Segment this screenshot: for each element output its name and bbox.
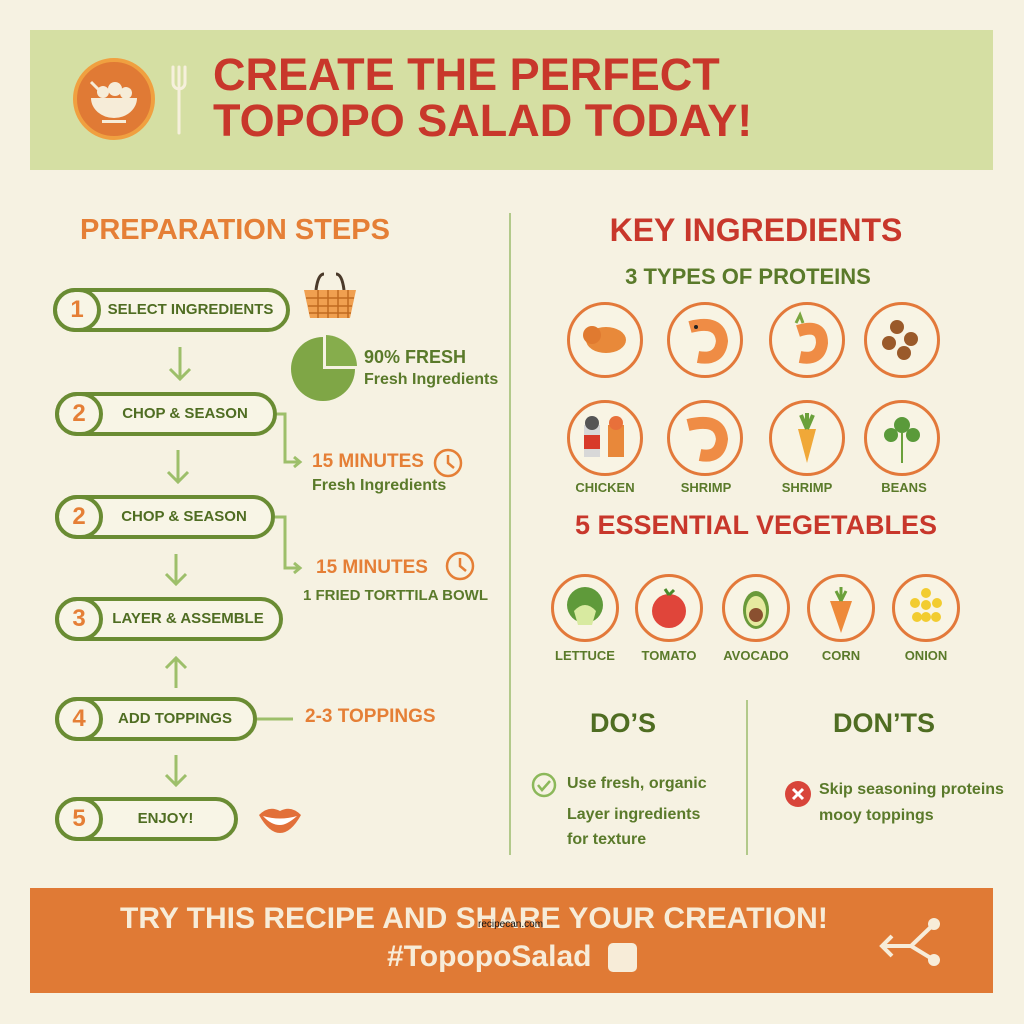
step 1: SELECT INGREDIENTS xyxy=(108,301,273,318)
divider xyxy=(509,213,511,855)
icon: share xyxy=(879,918,940,966)
label: avocado: AVOCADO xyxy=(723,648,789,663)
heading: do's: DO’S xyxy=(590,708,656,738)
icon: lettuce xyxy=(551,574,619,642)
title xyxy=(213,49,752,146)
stat: 15 minutes xyxy=(312,451,446,494)
icon: chicken xyxy=(567,302,643,378)
step 2b: CHOP & SEASON xyxy=(121,508,247,525)
icon: carrot xyxy=(769,400,845,476)
step 2: 2 xyxy=(72,400,86,427)
label: tomato: TOMATO xyxy=(642,648,696,663)
icon: clock xyxy=(434,448,462,478)
stat: 15 minutes tortilla xyxy=(303,557,488,604)
don'ts list xyxy=(785,781,1004,824)
stat: 90% fresh: Fresh Ingredients xyxy=(364,371,498,388)
stat: 15 minutes tortilla: 15 MINUTES xyxy=(316,557,428,578)
icon: check xyxy=(532,772,556,798)
do's list: Use fresh, organic xyxy=(567,775,707,792)
heading: key ingredients: KEY INGREDIENTS xyxy=(610,212,902,248)
icon: shrimp xyxy=(769,302,845,378)
do's list: Layer ingredients xyxy=(567,806,700,823)
step 1 xyxy=(53,288,290,332)
icon: tomato xyxy=(635,574,703,642)
arrows and connectors xyxy=(165,347,302,787)
title: TOPOPO SALAD TODAY! xyxy=(213,95,752,146)
call to action: TRY THIS RECIPE AND SHARE YOUR CREATION! xyxy=(120,902,828,935)
label: chicken: CHICKEN xyxy=(575,480,635,495)
footer banner xyxy=(30,888,993,993)
step 5: 5 xyxy=(72,805,86,832)
do's list xyxy=(532,772,707,848)
icon: beans xyxy=(864,302,940,378)
icon: salad bowl xyxy=(73,58,155,140)
step 5: ENJOY! xyxy=(138,810,193,827)
don'ts list: Skip seasoning proteins xyxy=(819,781,1004,798)
subheading: vegetables: 5 ESSENTIAL VEGETABLES xyxy=(575,510,937,540)
label: beans: BEANS xyxy=(881,480,927,495)
do's list: for texture xyxy=(567,831,646,848)
icon: twitter xyxy=(608,943,637,972)
step 3: 3 xyxy=(72,605,86,632)
step 4: ADD TOPPINGS xyxy=(118,710,232,727)
icon: seasoning xyxy=(567,400,643,476)
heading: preparation steps: PREPARATION STEPS xyxy=(80,214,390,246)
stat: 15 minutes tortilla: 1 FRIED TORTTILA BOWL xyxy=(303,587,488,604)
watermark: recipecan.com xyxy=(478,919,543,930)
icon: clock xyxy=(446,552,474,580)
step 2 xyxy=(55,392,277,436)
label: onion: ONION xyxy=(905,648,947,663)
label: corn: CORN xyxy=(822,648,860,663)
icon: avocado xyxy=(722,574,790,642)
icon: fork xyxy=(172,66,186,134)
icon: lips xyxy=(259,808,301,833)
stat: toppings: 2-3 TOPPINGS xyxy=(305,706,436,727)
icon: parsley xyxy=(864,400,940,476)
step 3 xyxy=(55,597,283,641)
vegetable icons xyxy=(551,574,960,663)
step 2b: 2 xyxy=(72,503,86,530)
stat: 90% fresh xyxy=(364,347,498,388)
step 5 xyxy=(55,797,238,841)
title: CREATE THE PERFECT xyxy=(213,49,720,100)
icon: shrimp xyxy=(667,400,743,476)
heading: don'ts: DON’TS xyxy=(833,708,935,738)
stat: 15 minutes: Fresh Ingredients xyxy=(312,477,446,494)
step 2b xyxy=(55,495,275,539)
don'ts list: mooy toppings xyxy=(819,807,934,824)
stat: 15 minutes: 15 MINUTES xyxy=(312,451,424,472)
protein icons xyxy=(567,302,940,495)
icon: corn xyxy=(892,574,960,642)
icon: basket xyxy=(304,272,356,318)
step 4 xyxy=(55,697,257,741)
step 1: 1 xyxy=(70,296,84,323)
label: shrimp: SHRIMP xyxy=(782,480,832,495)
stat: 90% fresh: 90% FRESH xyxy=(364,347,466,367)
step 3: LAYER & ASSEMBLE xyxy=(112,610,264,627)
header banner xyxy=(30,30,993,170)
step 2: CHOP & SEASON xyxy=(122,405,248,422)
step 4: 4 xyxy=(72,705,86,732)
hashtag: #TopopoSalad xyxy=(387,940,591,973)
label: shrimp: SHRIMP xyxy=(681,480,731,495)
subheading: proteins: 3 TYPES OF PROTEINS xyxy=(625,264,871,289)
icon: carrot xyxy=(807,574,875,642)
icon: shrimp xyxy=(667,302,743,378)
pie chart: 90% fresh xyxy=(291,335,357,401)
icon: cross xyxy=(785,781,811,807)
label: lettuce: LETTUCE xyxy=(555,648,615,663)
